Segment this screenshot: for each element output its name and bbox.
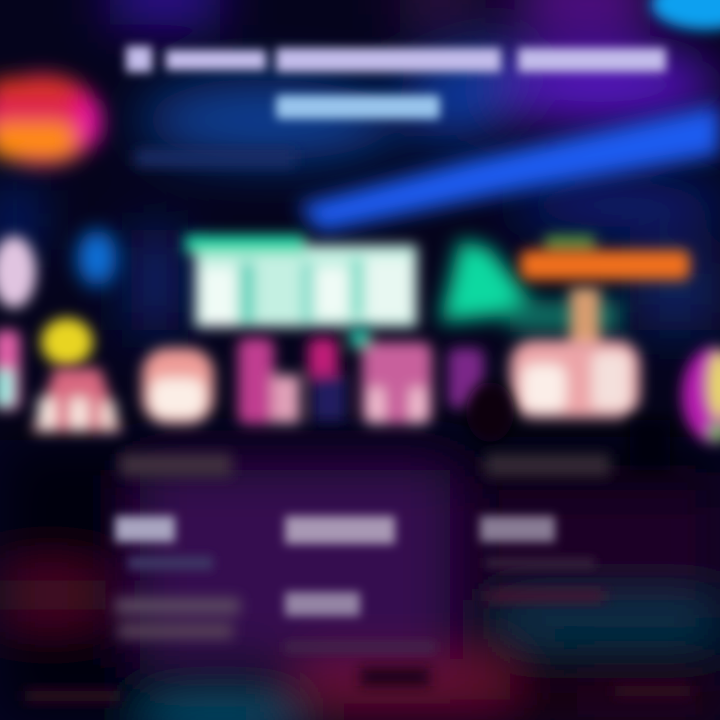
panel: right column heading xyxy=(485,454,610,476)
subtitle xyxy=(135,150,295,166)
peach column xyxy=(570,288,600,354)
panel: left column heading xyxy=(120,454,232,476)
figures row xyxy=(32,328,640,432)
silhouette figure xyxy=(466,382,670,470)
background: upper glow xyxy=(0,0,720,330)
top right cyan glow xyxy=(651,0,720,30)
text block: lower center xyxy=(285,592,435,652)
teal green block xyxy=(440,240,620,332)
dark spot at bottom xyxy=(360,668,430,686)
stat block: right xyxy=(480,516,595,568)
left red and orange blob xyxy=(0,74,102,166)
text block: lower left xyxy=(115,598,240,638)
footer text right xyxy=(615,685,690,697)
central white and green block xyxy=(185,235,417,327)
stat block: left xyxy=(115,516,213,570)
footer text left xyxy=(25,690,120,702)
orange bar xyxy=(520,236,690,280)
stat block: center xyxy=(285,516,395,544)
title line 1 xyxy=(126,46,666,72)
text block: lower right xyxy=(485,590,605,602)
right ball xyxy=(682,347,720,443)
blue light beam xyxy=(298,105,720,232)
title line 2 xyxy=(276,95,440,119)
background: lower section xyxy=(0,440,720,720)
left pink figures xyxy=(0,236,36,410)
yellow blob xyxy=(41,318,93,366)
left blue blob xyxy=(77,230,117,286)
title xyxy=(126,46,666,119)
